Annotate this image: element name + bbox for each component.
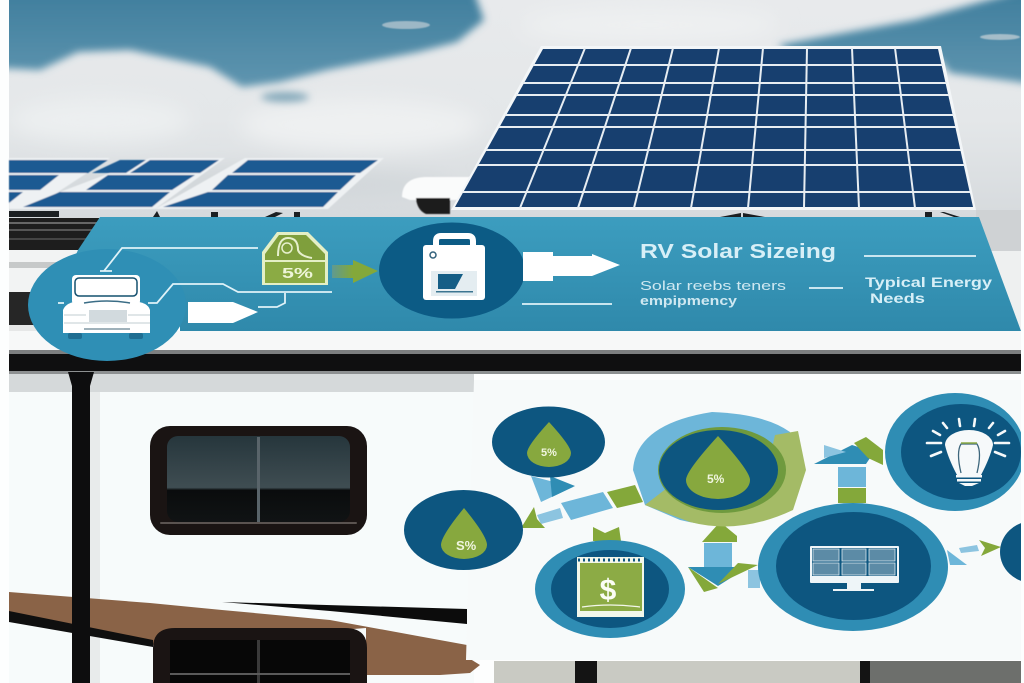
large solar panel: [451, 46, 976, 210]
flow node: drop 5% top: 5%: [541, 447, 557, 459]
flow diagram connectors: [521, 437, 1001, 592]
battery circle: [379, 222, 525, 318]
flow node: monitor: [758, 503, 948, 631]
white infographic panel: [466, 380, 1021, 660]
roof mount dome: [402, 177, 475, 214]
icon: green tag 5%: 5%: [282, 265, 313, 282]
RV roof edge and rails: [9, 210, 1021, 374]
flow node: drop 5% top: [492, 406, 605, 478]
flow node: drop 5% left: [404, 490, 523, 570]
flow node: partial circle at right edge: [1000, 521, 1024, 583]
banner: blue infographic band: [28, 217, 1021, 361]
flow node: central drop 5%: 5%: [707, 472, 725, 486]
icon: green tag 5%: [262, 232, 328, 285]
panel mounts: [9, 211, 960, 217]
subtitle text: [640, 278, 787, 308]
solar panels on the left: [9, 158, 384, 209]
icon: battery pack: [423, 236, 485, 300]
green arrow: [332, 260, 378, 283]
sky with clouds: [0, 0, 1024, 218]
flow node: central drop 5%: [633, 412, 806, 526]
right page margin: [1021, 0, 1024, 683]
connector lines: [58, 248, 976, 307]
subtitle text: empipmency: [640, 293, 738, 308]
undercarriage strip: [494, 661, 1021, 683]
flow node: dollar notepad: $: [600, 574, 617, 607]
typical energy needs label: Needs: [870, 290, 925, 306]
typical energy needs label: Typical Energy: [865, 274, 992, 290]
RV side wall: [9, 374, 474, 683]
downspout: [68, 372, 94, 683]
truck badge circle: [28, 249, 186, 361]
icon: RV front: [63, 275, 150, 339]
lower RV window: [153, 628, 367, 683]
typical energy needs label: [865, 274, 992, 306]
flow node: drop 5% left: S%: [456, 538, 477, 553]
subtitle text: Solar reebs teners: [640, 278, 787, 293]
white arrow: [523, 252, 620, 281]
title: RV Solar Sizeing: [640, 241, 836, 263]
white small arrow: [188, 302, 258, 323]
flow node: dollar notepad: [535, 540, 685, 638]
brown swoosh stripe: [9, 592, 480, 675]
flow node: light bulb: [885, 393, 1024, 511]
RV window: [150, 426, 367, 535]
